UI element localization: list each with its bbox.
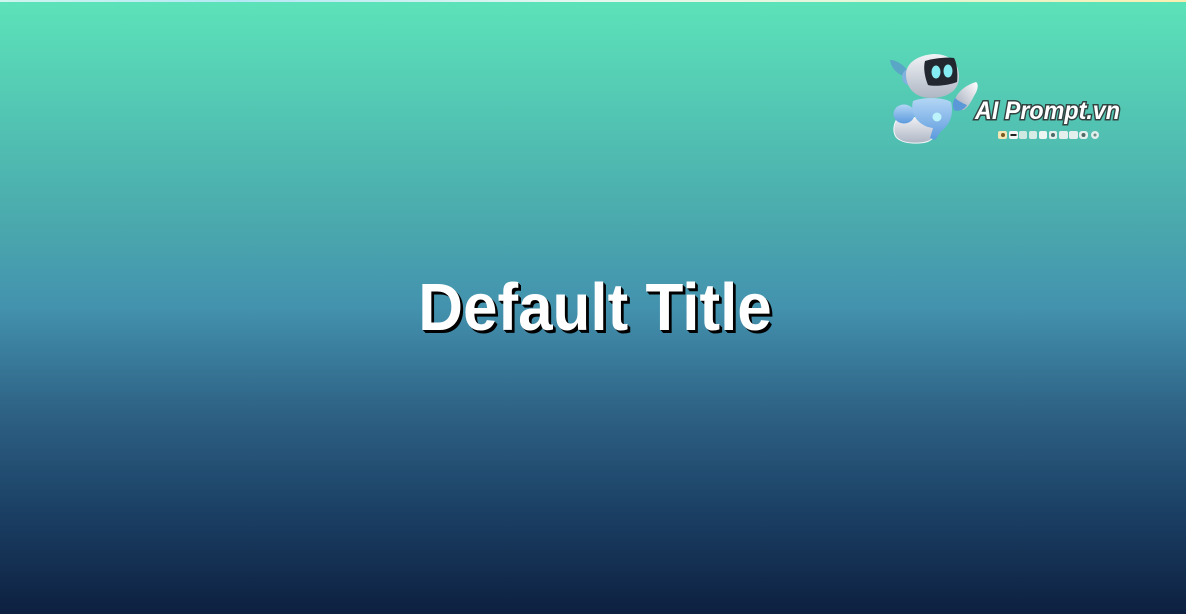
eyes	[932, 66, 940, 78]
head	[906, 54, 959, 98]
logo: AI Prompt.vn	[890, 54, 1120, 144]
right arm	[955, 82, 978, 110]
visor	[924, 58, 957, 86]
antenna	[890, 60, 908, 76]
icon row	[998, 131, 1099, 139]
chest light	[932, 112, 942, 122]
top accent line	[0, 0, 1186, 2]
lower body	[894, 116, 939, 143]
icon: robot mascot	[890, 54, 978, 143]
title: Default Title	[418, 270, 772, 345]
torso	[912, 98, 952, 140]
left arm	[894, 104, 914, 124]
ear	[902, 69, 916, 85]
wordmark: AI Prompt.vn	[974, 97, 1120, 125]
